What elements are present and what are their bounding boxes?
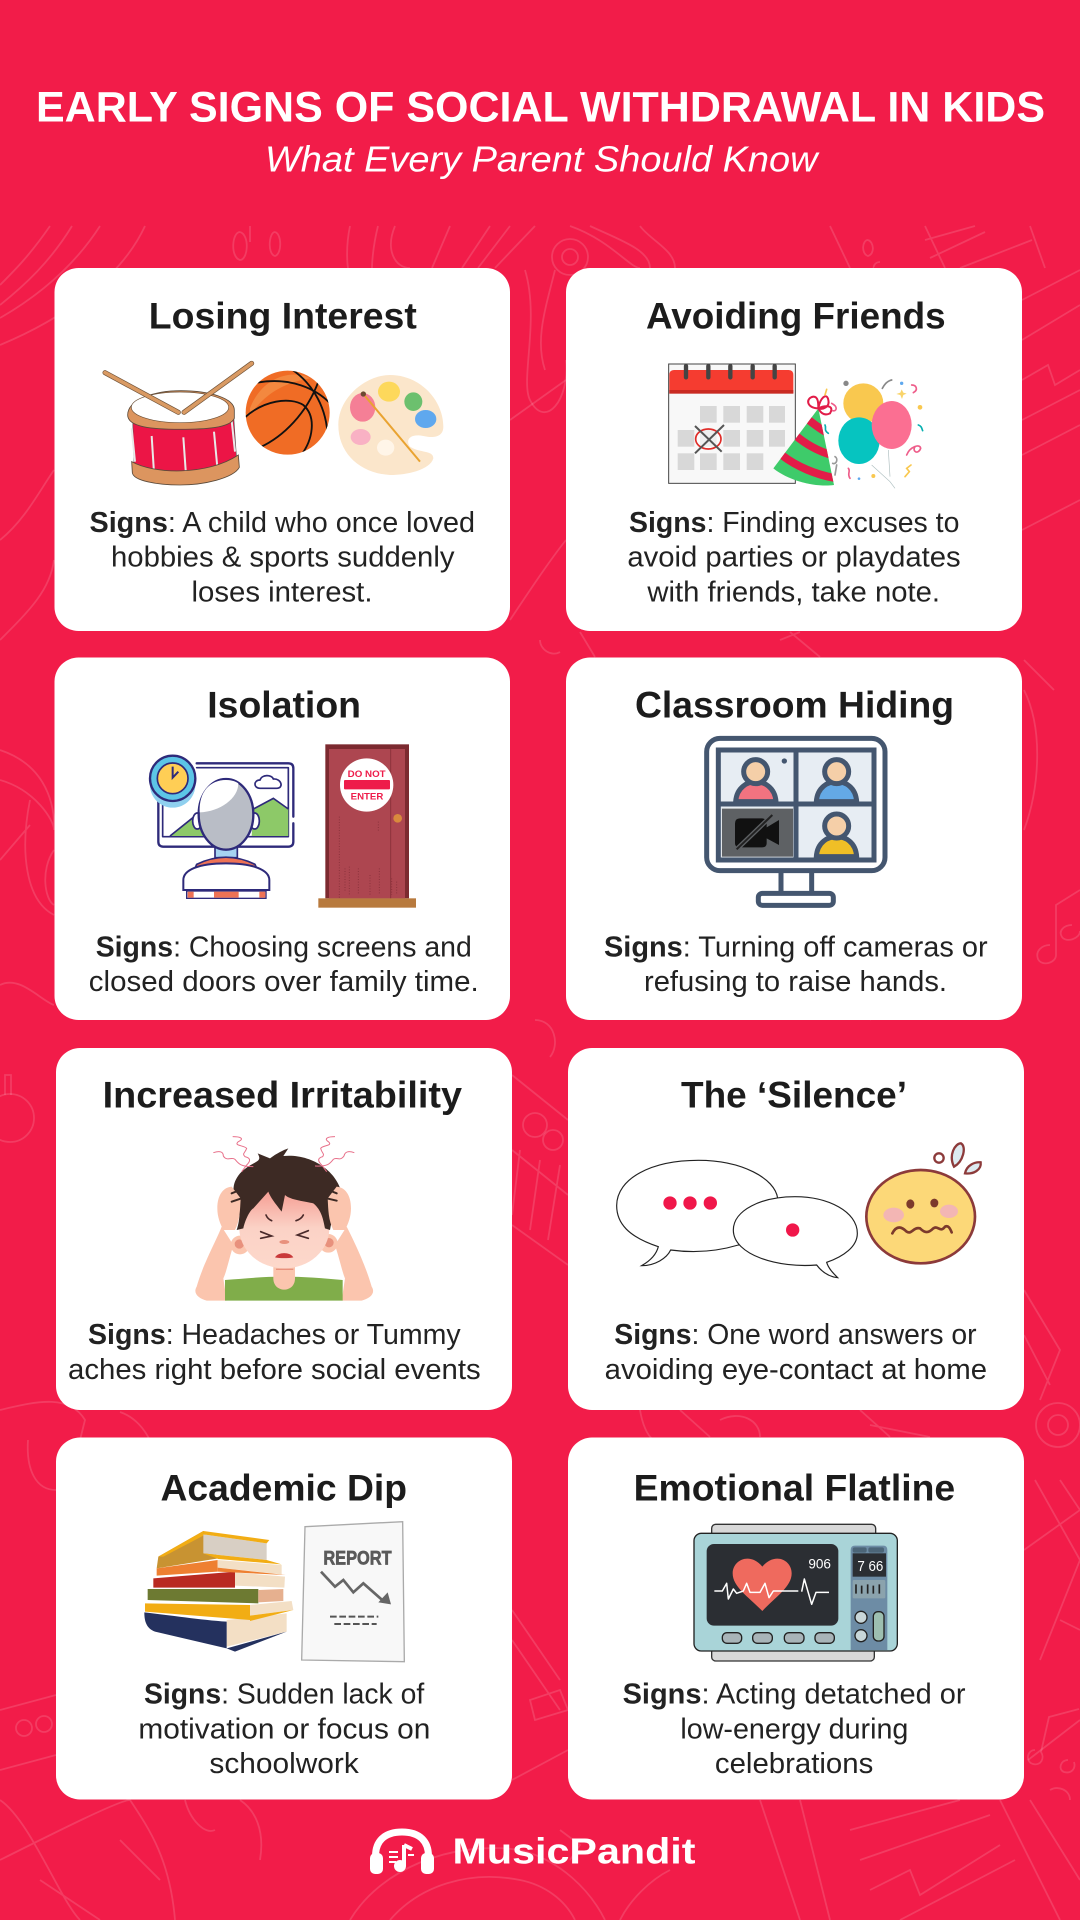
- text: avoiding friends signs: with friends, take note.: [646, 576, 940, 608]
- icon: child at screen and closed door: [150, 744, 416, 908]
- text: classroom hiding signs: Signs: Turning off cameras or: [604, 931, 988, 963]
- icon: calendar, party hat, balloons: [669, 364, 923, 488]
- text: isolation signs: closed doors over family time.: [89, 966, 479, 998]
- heading: losing interest: Losing Interest: [149, 295, 417, 337]
- icon: headphones with music note: [370, 1832, 434, 1874]
- heading: isolation: Isolation: [207, 684, 361, 726]
- heading: classroom hiding: Classroom Hiding: [635, 684, 954, 726]
- text: flatline signs: Signs: Acting detatched or: [623, 1678, 966, 1710]
- heading: academic dip: Academic Dip: [160, 1466, 407, 1508]
- panel: avoiding friends: [566, 268, 1022, 631]
- text: irritability signs: Signs: Headaches or Tummy: [88, 1319, 461, 1351]
- panel: isolation: [54, 658, 510, 1020]
- panel: increased irritability: [56, 1048, 512, 1410]
- text: flatline signs: celebrations: [715, 1748, 873, 1780]
- icon: heart monitor: [694, 1524, 897, 1661]
- text: losing interest signs: loses interest.: [192, 576, 372, 608]
- panel: the silence: [568, 1048, 1024, 1410]
- icon: child with headache: [195, 1137, 373, 1301]
- heading: emotional flatline: Emotional Flatline: [634, 1466, 955, 1508]
- text: academic dip signs: Signs: Sudden lack of: [144, 1678, 424, 1710]
- panel: emotional flatline: [568, 1438, 1024, 1800]
- heading: the silence: The ‘Silence’: [681, 1073, 907, 1115]
- text: flatline signs: low-energy during: [680, 1713, 908, 1745]
- text: silence signs: avoiding eye-contact at home: [605, 1354, 987, 1386]
- title: EARLY SIGNS OF SOCIAL WITHDRAWAL IN KIDS: [36, 84, 1045, 132]
- text: losing interest signs: [90, 507, 475, 608]
- text: irritability signs: [68, 1319, 481, 1386]
- text: silence signs: Signs: One word answers or: [614, 1319, 977, 1351]
- heading: avoiding friends: Avoiding Friends: [646, 295, 946, 337]
- text: classroom hiding signs: [604, 931, 988, 998]
- logo: MusicPandit: [370, 1831, 696, 1874]
- text: academic dip signs: schoolwork: [209, 1748, 360, 1780]
- text: avoiding friends signs: avoid parties or playdates: [627, 542, 961, 574]
- icon: books and falling report: [144, 1522, 404, 1662]
- text: flatline signs: [623, 1678, 966, 1780]
- icon: books and falling report: REPORT: [323, 1548, 392, 1569]
- text: classroom hiding signs: refusing to raise hands.: [644, 966, 947, 998]
- icon: heart monitor: 906: [808, 1555, 831, 1571]
- text: avoiding friends signs: Signs: Finding excuses to: [629, 507, 959, 539]
- icon: drum, basketball, palette: [105, 363, 443, 485]
- wordmark: MusicPandit: [452, 1831, 696, 1872]
- icon: child at screen and closed door: ENTER: [351, 791, 384, 801]
- text: academic dip signs: [138, 1678, 430, 1780]
- panel: classroom hiding: [566, 658, 1022, 1020]
- icon: video call monitor: [707, 738, 885, 905]
- subtitle: What Every Parent Should Know: [265, 138, 820, 180]
- icon: heart monitor: 7 66: [857, 1559, 883, 1575]
- icon: child at screen and closed door: DO NOT: [348, 769, 386, 779]
- text: losing interest signs: hobbies & sports suddenly: [111, 542, 455, 574]
- text: silence signs: [605, 1319, 987, 1386]
- text: losing interest signs: Signs: A child who once loved: [90, 507, 475, 539]
- panel: academic dip: [56, 1438, 512, 1800]
- text: isolation signs: [89, 931, 479, 998]
- panel: losing interest: [54, 268, 510, 631]
- text: academic dip signs: motivation or focus on: [138, 1713, 430, 1745]
- heading: increased irritability: Increased Irritability: [103, 1073, 462, 1115]
- text: avoiding friends signs: [627, 507, 961, 608]
- icon: speech bubbles and worried face: [617, 1143, 981, 1278]
- text: isolation signs: Signs: Choosing screens and: [96, 931, 472, 963]
- text: irritability signs: aches right before social events: [68, 1354, 481, 1386]
